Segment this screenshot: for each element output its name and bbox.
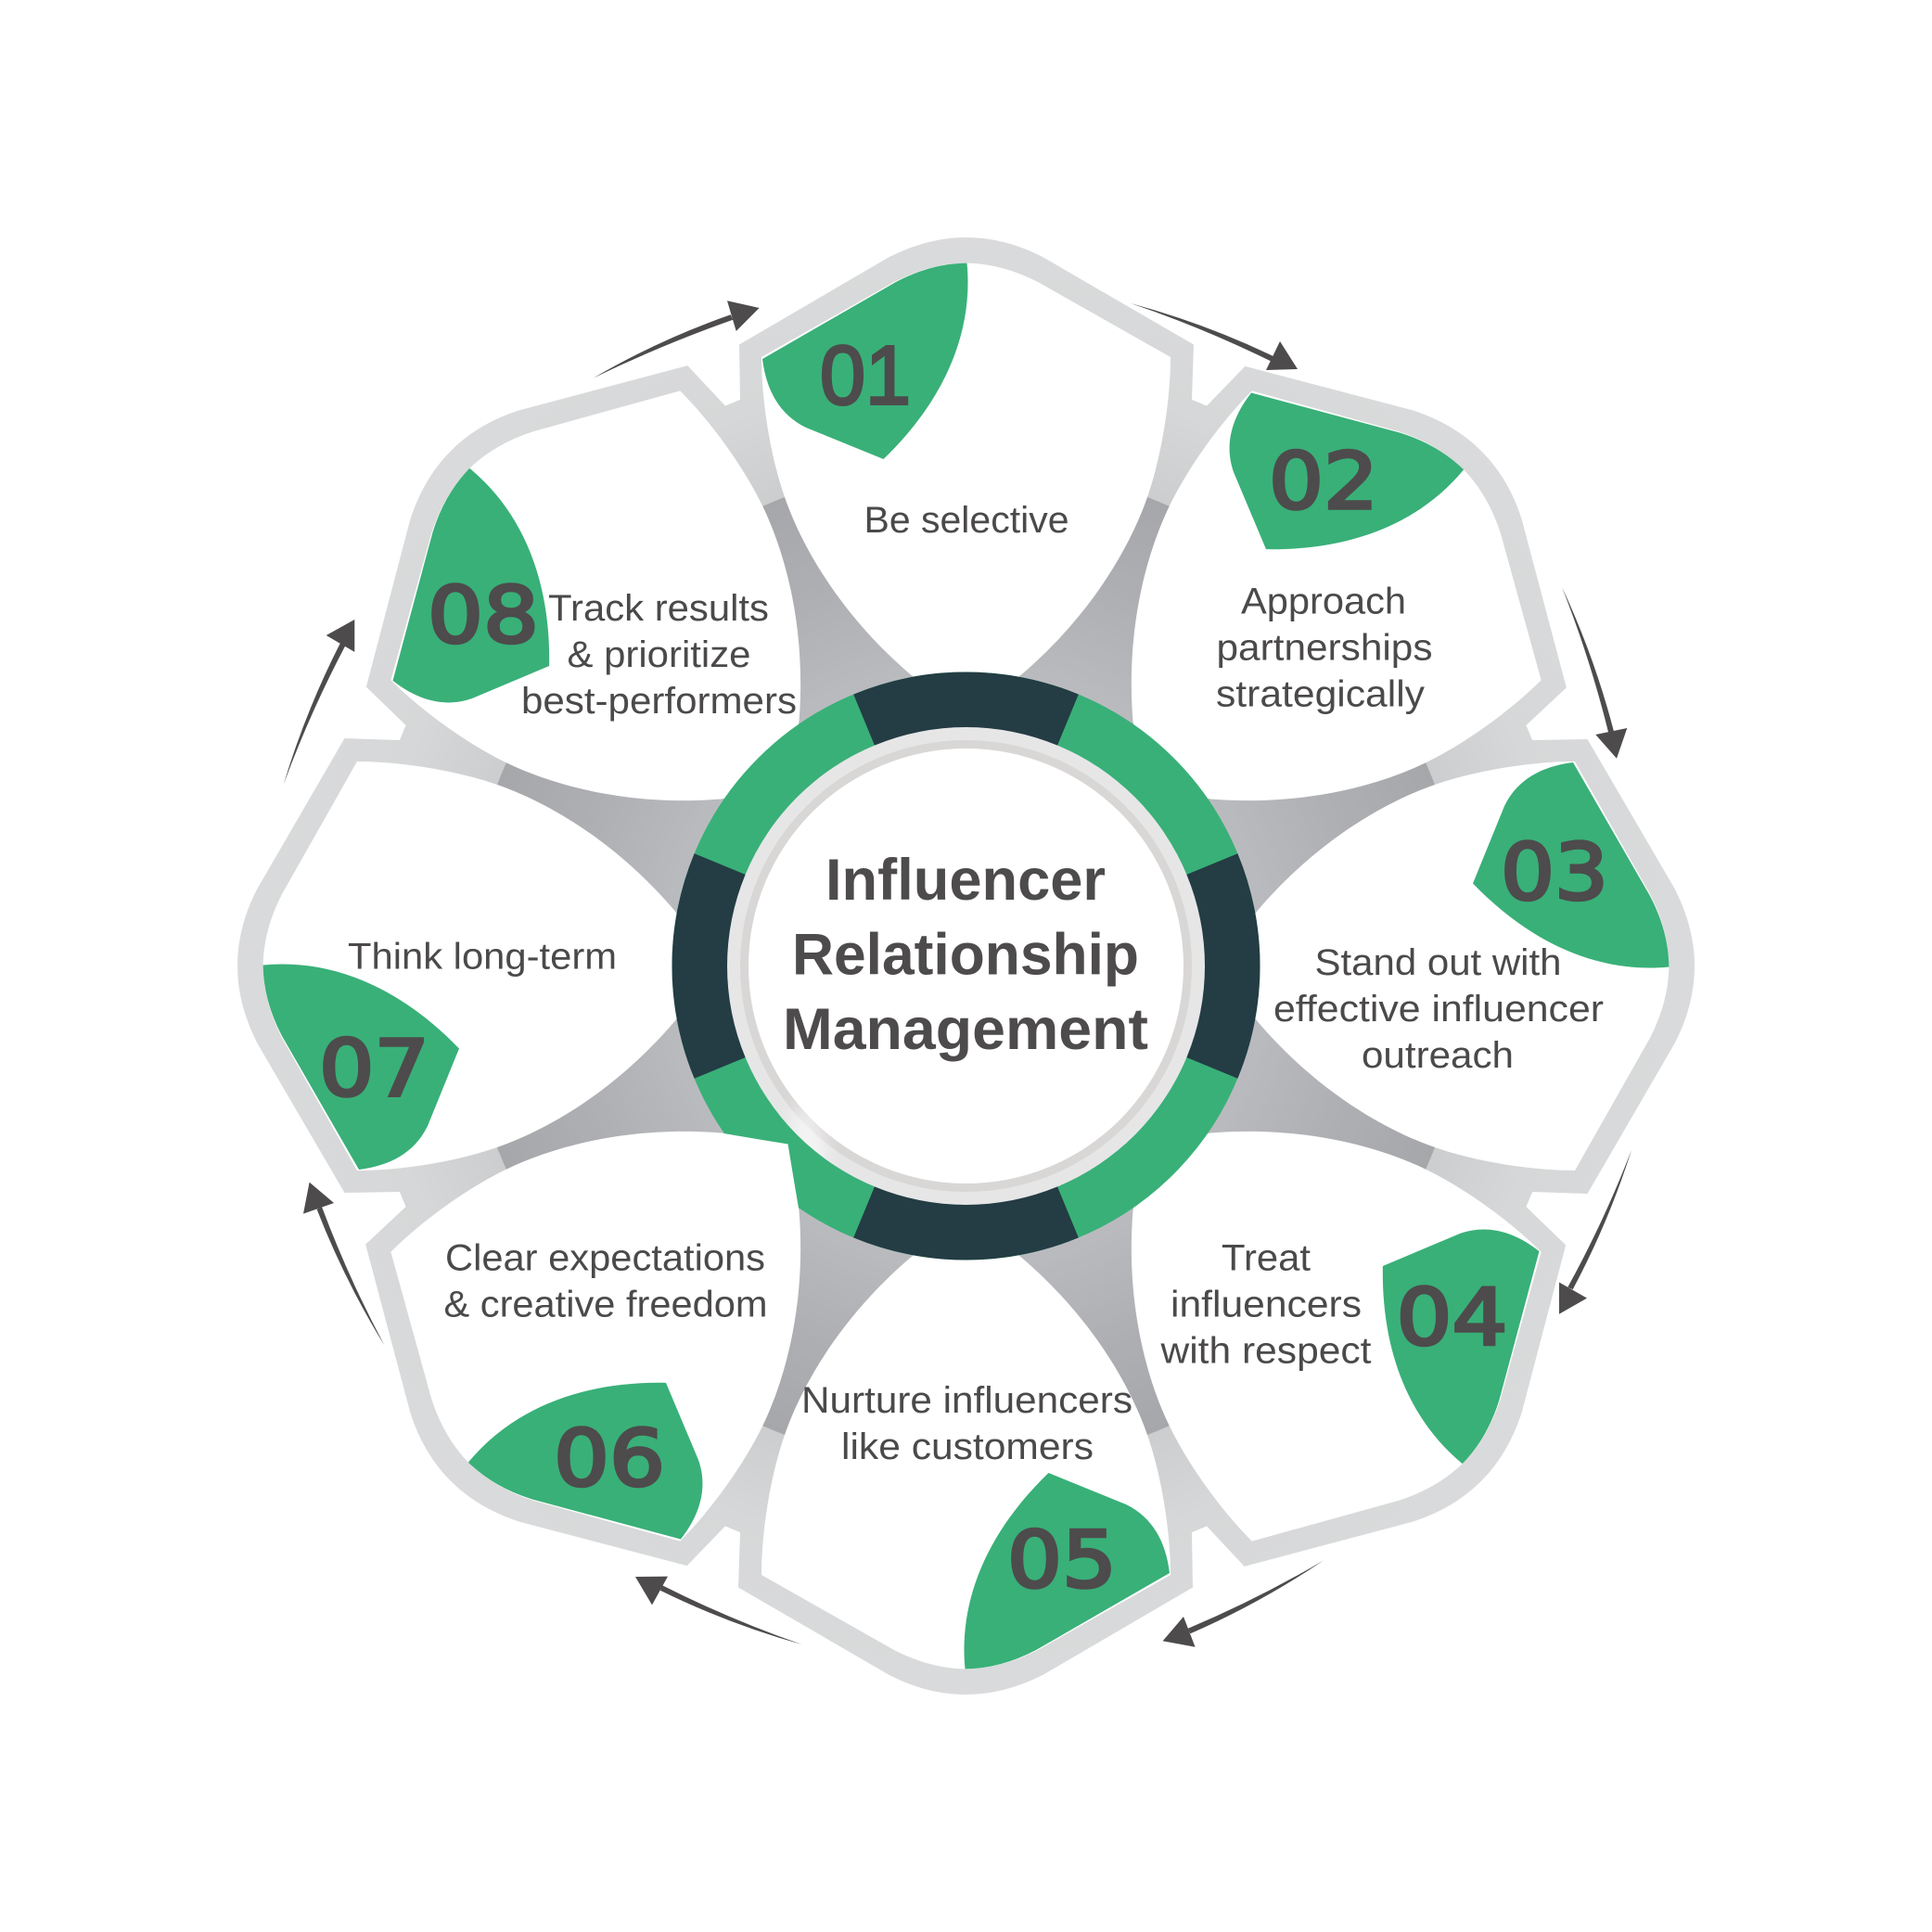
- label 08: [521, 588, 797, 722]
- label 05: Nurture influencers: [801, 1380, 1132, 1421]
- title: Influencer: [825, 848, 1106, 913]
- label 02: [1216, 581, 1432, 714]
- label 04: influencers: [1171, 1284, 1362, 1324]
- label 02: Approach: [1241, 581, 1406, 621]
- label 06: [443, 1237, 768, 1324]
- arrow: 08 to 01: [594, 301, 760, 378]
- label 08: Track results: [548, 588, 769, 629]
- label 04: [1159, 1237, 1371, 1371]
- panel: step 05: [761, 1218, 1171, 1669]
- petal 06 overlap cutting the ring: [706, 1105, 827, 1226]
- badge 08: [325, 467, 608, 751]
- title: Relationship: [792, 922, 1139, 987]
- panel: step 04: [1000, 1000, 1607, 1607]
- label 05: [801, 1380, 1132, 1467]
- arrow: 05 to 06: [635, 1577, 802, 1644]
- label 06: Clear expectations: [445, 1237, 765, 1278]
- title: [783, 848, 1148, 1062]
- arrow: 03 to 04: [1559, 1150, 1631, 1314]
- label 04: Treat: [1222, 1237, 1311, 1278]
- panel: step 03: [1218, 761, 1669, 1171]
- label 01: Be selective: [864, 500, 1068, 541]
- dark grey connecting web: [464, 464, 1469, 1469]
- label 03: [1273, 942, 1604, 1076]
- label 05: like customers: [841, 1427, 1094, 1467]
- panel: step 08: [325, 325, 932, 932]
- panel: step 07: [263, 761, 714, 1171]
- number 01: 01: [820, 330, 911, 423]
- centre disc with layered rings: [727, 727, 1205, 1205]
- arrow: 07 to 08: [284, 620, 354, 785]
- badge 02: [1181, 325, 1465, 608]
- badge 01: [762, 263, 968, 459]
- panel: step 01: [761, 263, 1171, 714]
- arrow: 04 to 05: [1163, 1560, 1324, 1647]
- title: Management: [783, 997, 1148, 1062]
- arrow: 06 to 07: [303, 1183, 385, 1346]
- number 04: 04: [1397, 1273, 1508, 1363]
- label 08: & prioritize: [568, 634, 751, 675]
- panel: step 06: [325, 1000, 932, 1607]
- number 07: 07: [319, 1023, 429, 1114]
- badge 04: [1324, 1181, 1607, 1465]
- number 05: 05: [1007, 1515, 1117, 1606]
- number 02: 02: [1269, 436, 1378, 527]
- label 08: best-performers: [521, 681, 797, 722]
- panel: step 02: [1000, 325, 1607, 932]
- label 06: & creative freedom: [443, 1284, 768, 1324]
- label 02: strategically: [1216, 673, 1425, 714]
- outer frame of eight petals: [237, 237, 1695, 1695]
- badge 03: [1473, 762, 1669, 968]
- arrow: 02 to 03: [1562, 587, 1627, 759]
- number 06: 06: [554, 1414, 665, 1504]
- label 03: Stand out with: [1315, 942, 1562, 983]
- label 07: Think long-term: [348, 936, 617, 977]
- label 03: outreach: [1362, 1035, 1514, 1076]
- arrow: 01 to 02: [1131, 303, 1298, 370]
- label 03: effective influencer: [1273, 989, 1604, 1030]
- number 08: 08: [428, 569, 539, 660]
- badge 06: [467, 1324, 751, 1607]
- number 03: 03: [1501, 827, 1608, 918]
- label 04: with respect: [1159, 1330, 1371, 1371]
- badge 05: [964, 1473, 1170, 1669]
- central segmented ring: [672, 672, 1260, 1260]
- badge 07: [263, 964, 459, 1170]
- label 02: partnerships: [1217, 627, 1432, 668]
